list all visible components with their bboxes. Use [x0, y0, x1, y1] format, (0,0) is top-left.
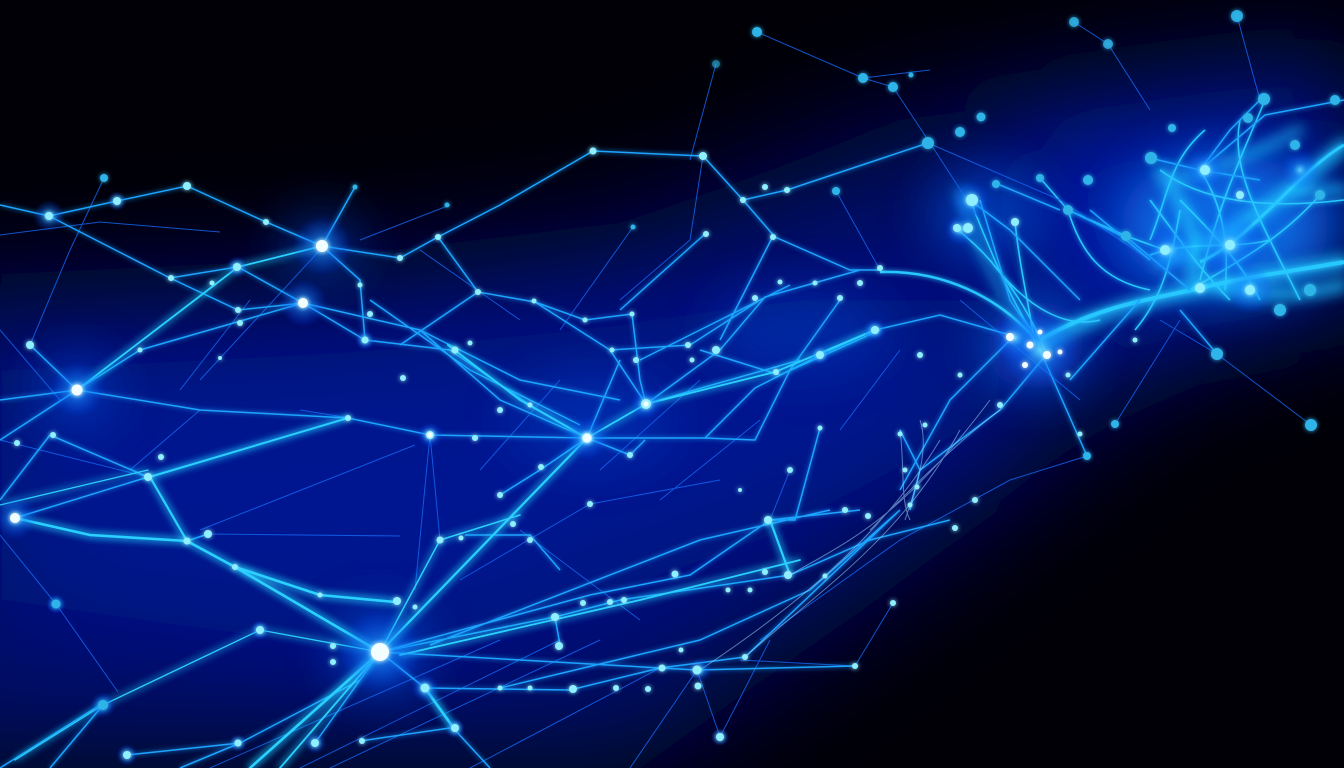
- bright main lines: [0, 246, 875, 768]
- hot white hubs: [10, 240, 1062, 661]
- bright cyan glow: upper right cluster: [37, 155, 1330, 692]
- flowing light strands on the right: [960, 130, 1344, 345]
- bright network nodes: [14, 148, 1255, 759]
- pale strands near centre right: [700, 400, 1000, 670]
- node halos: [0, 150, 1320, 766]
- right cluster tangle: [880, 100, 1344, 350]
